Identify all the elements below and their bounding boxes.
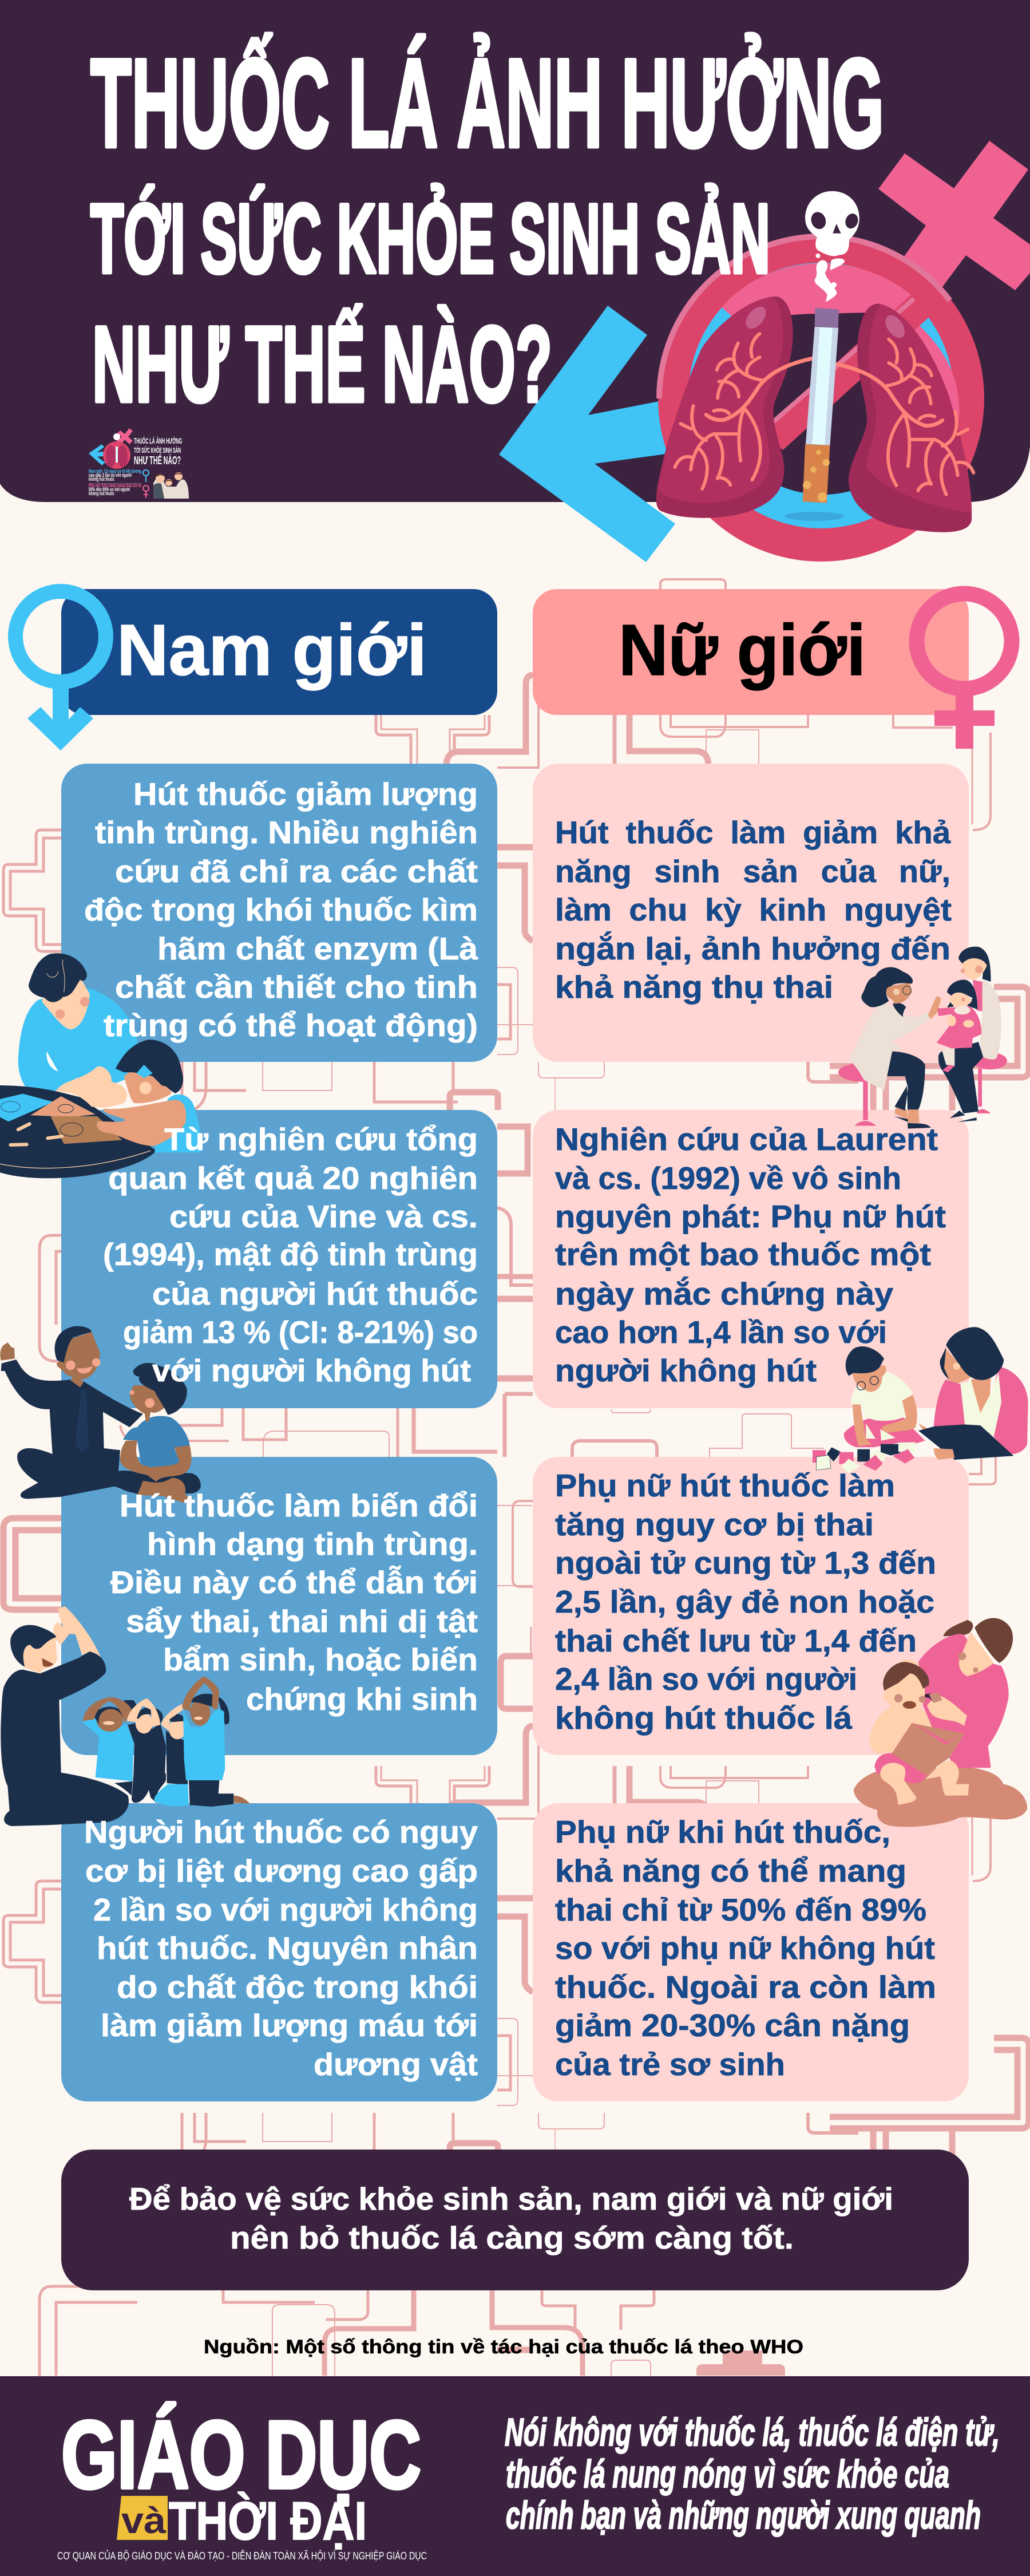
text: male card 1: độc trong khói thuốc kìm bbox=[84, 892, 478, 927]
logo: Giáo dục và Thời đại bbox=[57, 2401, 427, 2562]
text: male card 3: hình dạng tinh trùng. bbox=[147, 1526, 478, 1562]
illustration: woman and boy playing blocks bbox=[813, 1327, 1028, 1473]
text: female card 1: làm chu kỳ kinh nguyệt bbox=[555, 892, 952, 927]
text: female card 1 bbox=[555, 815, 952, 1005]
text: female card 2: Nghiên cứu của Laurent bbox=[555, 1121, 938, 1157]
icon: prohibition ring bbox=[658, 235, 984, 562]
panel heading: Nữ giới: Nữ giới bbox=[619, 610, 866, 690]
icon: skull and smoke bbox=[805, 191, 860, 302]
slogan bbox=[505, 2411, 1000, 2537]
text: male card 1: hãm chất enzym (Là bbox=[157, 931, 478, 966]
callout: conclusion: nên bỏ thuốc lá càng sớm càng tốt. bbox=[230, 2220, 794, 2255]
text: male card 2: quan kết quả 20 nghiên bbox=[108, 1160, 478, 1196]
text: female card 2: trên một bao thuốc một bbox=[555, 1236, 931, 1272]
text: female card 2: người không hút bbox=[555, 1353, 817, 1388]
text: male card 3: Hút thuốc làm biến đổi bbox=[120, 1488, 478, 1523]
text: female card 3 bbox=[555, 1468, 936, 1736]
text: male card 2: giảm 13 % (CI: 8-21%) so bbox=[123, 1314, 478, 1350]
thumbnail of related infographic: cao gấp 2 lần so với người bbox=[89, 472, 132, 478]
panel heading: Nữ giới bbox=[533, 589, 969, 715]
callout: conclusion bbox=[61, 2150, 969, 2290]
thumbnail of related infographic: NHƯ THẾ NÀO? bbox=[134, 454, 181, 467]
text: male card 1: tinh trùng. Nhiều nghiên bbox=[95, 815, 478, 850]
icon: cigarette bbox=[803, 308, 839, 503]
logo: yellow và block: và bbox=[121, 2500, 166, 2541]
thumbnail of related infographic: THUỐC LÁ ẢNH HƯỞNG bbox=[134, 436, 182, 445]
text: male card 2: của người hút thuốc bbox=[152, 1276, 478, 1311]
title: NHƯ THẾ NÀO? bbox=[92, 304, 552, 424]
text: female card 1: ngắn lại, ảnh hưởng đến bbox=[555, 931, 950, 966]
text: female card 2: ngày mắc chứng này bbox=[555, 1276, 893, 1311]
icon: pink x mark bbox=[878, 141, 1030, 302]
logo: Giáo dục và Thời đại: GIÁO DỤC bbox=[61, 2401, 421, 2508]
thumbnail of related infographic: không hút thuốc bbox=[89, 476, 114, 482]
text: female card 4: Phụ nữ khi hút thuốc, bbox=[555, 1814, 890, 1850]
text: female card 3: 2,5 lần, gây đẻ non hoặc bbox=[555, 1584, 934, 1619]
callout: conclusion: Để bảo vệ sức khỏe sinh sản, nam giới và nữ giới bbox=[129, 2181, 893, 2217]
text: female card 4: khả năng có thể mang bbox=[555, 1853, 906, 1888]
icon: lungs bbox=[656, 297, 973, 532]
text: male card 4: làm giảm lượng máu tới bbox=[101, 2008, 478, 2043]
text: female card 4: thuốc. Ngoài ra còn làm bbox=[555, 1969, 936, 2005]
text: female card 4 bbox=[555, 1814, 936, 2082]
text: male card 3: sẩy thai, thai nhi dị tật bbox=[126, 1603, 478, 1639]
icon: male arrow bbox=[499, 306, 721, 562]
text: male card 4: cơ bị liệt dương cao gấp bbox=[85, 1853, 478, 1888]
logo: Giáo dục và Thời đại: CƠ QUAN CỦA BỘ GIÁO DỤC VÀ ĐÀO TẠO - DIỄN ĐÀN TOÀN XÃ HỘI VÌ SỰ NGHIỆP GIÁO DỤC bbox=[57, 2550, 427, 2562]
text: female card 3: 2,4 lần so với người bbox=[555, 1661, 857, 1697]
panel heading: Nam giới: Nam giới bbox=[117, 610, 427, 690]
text: female card 4: so với phụ nữ không hút bbox=[555, 1930, 935, 1966]
footer band bbox=[0, 2376, 1030, 2576]
text: male card 4 bbox=[84, 1814, 478, 2082]
thumbnail of related infographic bbox=[89, 428, 189, 499]
text: male card 3: bẩm sinh, hoặc biến bbox=[163, 1642, 478, 1677]
thumbnail of related infographic: 50% đến 89% so với người bbox=[89, 487, 130, 492]
text: female card 3: ngoài tử cung từ 1,3 đến bbox=[555, 1545, 936, 1581]
text: female card 2 bbox=[555, 1121, 946, 1388]
text: male card 4: do chất độc trong khói bbox=[117, 1969, 478, 2005]
header band bbox=[0, 0, 1030, 502]
thumbnail of related infographic: Nam giới: Có nguy cơ bị liệt dương bbox=[89, 468, 141, 474]
text: male card 4: 2 lần so với người không bbox=[93, 1892, 478, 1927]
text: male card 1: trùng có thể hoạt động) bbox=[104, 1008, 478, 1043]
text: male card 2 bbox=[103, 1121, 478, 1388]
text: female card 1: năng sinh sản của nữ, bbox=[555, 854, 950, 889]
text: male card 2: (1994), mật độ tinh trùng bbox=[103, 1236, 478, 1272]
illustration: father and child drawing bbox=[0, 953, 201, 1178]
cards bbox=[61, 764, 969, 2101]
text: female card 1: khả năng thụ thai bbox=[555, 969, 833, 1005]
illustration: doctor with mother and child bbox=[838, 947, 1007, 1129]
text: male card 4: hút thuốc. Nguyên nhân bbox=[97, 1930, 478, 1966]
text: male card 3: Điều này có thể dẫn tới bbox=[110, 1564, 478, 1600]
text: female card 3: không hút thuốc lá bbox=[555, 1700, 852, 1736]
thumbnail of related infographic: không hút thuốc bbox=[89, 491, 114, 496]
text: female card 3: thai chết lưu từ 1,4 đến bbox=[555, 1623, 917, 1658]
text: male card 1: chất cần thiết cho tinh bbox=[115, 969, 478, 1005]
text: female card 1: Hút thuốc làm giảm khả bbox=[555, 815, 950, 850]
title bbox=[90, 33, 884, 424]
thumbnail of related infographic: Phụ nữ: Khả năng mang thai chỉ từ bbox=[89, 483, 141, 488]
text: male card 2: với người không hút bbox=[152, 1353, 471, 1388]
text: female card 4: giảm 20-30% cân nặng bbox=[555, 2008, 910, 2043]
text: female card 2: và cs. (1992) về vô sinh bbox=[555, 1160, 901, 1196]
panel heading: Nam giới bbox=[61, 589, 497, 715]
illustration: doctor checking baby bbox=[854, 1618, 1027, 1827]
text: female card 4: thai chỉ từ 50% đến 89% bbox=[555, 1892, 926, 1927]
illustration: father and son sitting bbox=[0, 1326, 201, 1503]
icon: male symbol bbox=[15, 591, 106, 750]
text: male card 3: chứng khi sinh bbox=[246, 1681, 478, 1717]
text: female card 4: của trẻ sơ sinh bbox=[555, 2046, 785, 2082]
text: male card 1: cứu đã chỉ ra các chất bbox=[115, 854, 478, 889]
text: female card 2: nguyên phát: Phụ nữ hút bbox=[555, 1199, 946, 1234]
text: male card 1: Hút thuốc giảm lượng bbox=[133, 776, 478, 812]
thumbnail of related infographic: TỚI SỨC KHỎE SINH SẢN bbox=[134, 446, 181, 455]
logo: Giáo dục và Thời đại: THỜI ĐẠI bbox=[169, 2491, 367, 2551]
icon: female symbol bbox=[917, 594, 1012, 749]
text: female card 3: tăng nguy cơ bị thai bbox=[555, 1507, 874, 1542]
text: male card 4: dương vật bbox=[314, 2046, 478, 2082]
source note: Nguồn: Một số thông tin về tác hại của thuốc lá theo WHO bbox=[204, 2336, 803, 2358]
text: male card 4: Người hút thuốc có nguy bbox=[84, 1814, 478, 1850]
illustration: teacher and kids exercising bbox=[1, 1606, 250, 1826]
text: male card 2: cứu của Vine và cs. bbox=[169, 1199, 478, 1234]
text: male card 1 bbox=[84, 776, 478, 1043]
text: female card 3: Phụ nữ hút thuốc làm bbox=[555, 1468, 895, 1503]
text: male card 2: Từ nghiên cứu tổng bbox=[164, 1121, 478, 1157]
text: female card 2: cao hơn 1,4 lần so với bbox=[555, 1314, 887, 1350]
header illustration: prohibited cigarette over lungs bbox=[499, 141, 1030, 562]
text: male card 3 bbox=[110, 1488, 478, 1717]
